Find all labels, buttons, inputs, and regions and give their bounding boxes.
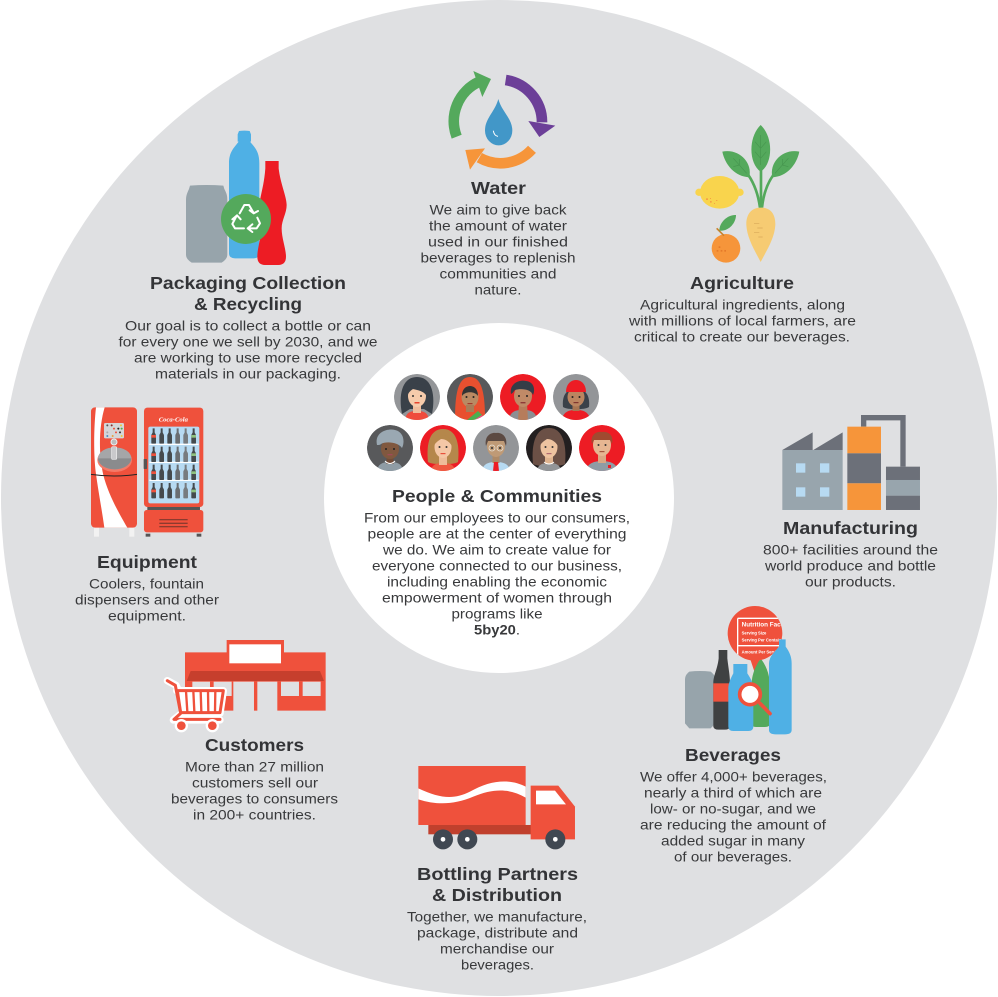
text: packaging: Our goal is to collect a bottle or can [125,318,371,334]
icon: bottles with nutrition facts: Amount Per Serving [742,650,782,655]
heading: water: Water [471,178,526,198]
panel: packaging collection and recycling [118,131,378,382]
text: beverages: of our beverages. [674,848,792,864]
text: beverages: low- or no-sugar, and we [650,800,816,816]
text: beverages: nearly a third of which are [644,784,822,800]
text: water: nature. [474,282,522,298]
text: agriculture: Agricultural ingredients, along [640,296,845,312]
text: people and communities: everyone connected to our business, [372,558,622,574]
text: equipment: dispensers and other [75,592,219,608]
text: water [420,202,576,298]
text: water: the amount of water [429,218,567,234]
icon: truck [418,766,575,849]
text: water: We aim to give back [430,202,568,218]
text: packaging: for every one we sell by 2030, and we [118,334,378,350]
text: bottling: beverages. [461,956,534,972]
text: people and communities: programs like [452,606,543,622]
text: water: beverages to replenish [420,250,576,266]
panel: manufacturing [763,418,938,590]
text: customers: More than 27 million [185,758,324,774]
text: water: used in our finished [428,234,568,250]
heading: bottling partners and distribution: Bottling Partners [417,864,578,884]
text: equipment: equipment. [108,608,186,624]
text: packaging: materials in our packaging. [155,366,341,382]
heading: people and communities: People & Communities [392,486,602,506]
heading: agriculture: Agriculture [690,273,794,293]
panel: people and communities [364,374,630,638]
text: manufacturing: 800+ facilities around the [763,542,938,558]
icon: fountain dispenser and cooler [91,407,203,537]
heading: packaging collection and recycling [150,273,346,314]
text: agriculture: with millions of local farmers, are [628,312,856,328]
text: packaging [118,318,378,382]
heading: customers: Customers [205,735,304,755]
avatars [367,374,625,471]
center circle [324,323,674,673]
text: agriculture: critical to create our beverages. [634,328,850,344]
text: equipment: Coolers, fountain [89,576,204,592]
text: water: communities and [440,266,556,282]
heading: bottling partners and distribution: & Distribution [432,885,562,905]
icon: lemon, orange, carrot [695,125,799,263]
panel: agriculture [628,125,856,345]
text: people and communities: From our employees to our consumers, [364,510,630,526]
heading: bottling partners and distribution [417,864,578,905]
heading: equipment: Equipment [97,552,197,572]
text: equipment [75,576,219,624]
heading: packaging collection and recycling: Packaging Collection [150,273,346,293]
panel: beverages [640,606,827,864]
text: people and communities: people are at the center of everything [368,526,626,542]
text: people and communities [364,510,630,638]
text: agriculture [628,296,856,344]
text: people and communities: empowerment of women through [382,590,612,606]
panel: water [420,71,576,298]
panel: bottling partners and distribution [407,766,587,972]
panel: customers [167,640,338,822]
icon: bottles with nutrition facts: Serving Size [742,631,767,636]
text: manufacturing [763,542,938,590]
text: beverages [640,768,827,864]
text: customers [171,758,338,822]
icon: fountain dispenser and cooler: Coca-Cola [159,417,189,424]
text: customers: in 200+ countries. [193,806,316,822]
text: manufacturing: our products. [805,574,896,590]
icon: bottles with nutrition facts: Nutrition Facts [742,622,787,629]
text: beverages: We offer 4,000+ beverages, [640,768,827,784]
icon: bottles with nutrition facts: Serving Per Container [742,637,786,642]
heading: packaging collection and recycling: & Recycling [194,294,302,314]
icon: bottles with nutrition facts [685,606,792,734]
text: people and communities: including enabling the economic [387,574,607,590]
text: manufacturing: world produce and bottle [764,558,936,574]
text: bottling [407,908,587,972]
text: bottling: merchandise our [440,940,554,956]
text: packaging: are working to use more recycled [134,350,362,366]
text: people and communities: 5by20. [474,622,520,638]
panel: equipment [75,407,219,624]
text: beverages: added sugar in many [661,832,805,848]
heading: beverages: Beverages [685,745,781,765]
text: customers: customers sell our [192,774,318,790]
text: customers: beverages to consumers [171,790,338,806]
icon: water cycle [454,71,555,170]
icon: bottles and recycling [186,131,287,265]
icon: store and shopping cart [167,640,326,732]
text: people and communities: we do. We aim to create value for [382,542,611,558]
heading: manufacturing: Manufacturing [783,518,918,538]
icon: factory [782,418,920,510]
text: bottling: Together, we manufacture, [407,908,587,924]
text: beverages: are reducing the amount of [640,816,826,832]
text: bottling: package, distribute and [417,924,578,940]
